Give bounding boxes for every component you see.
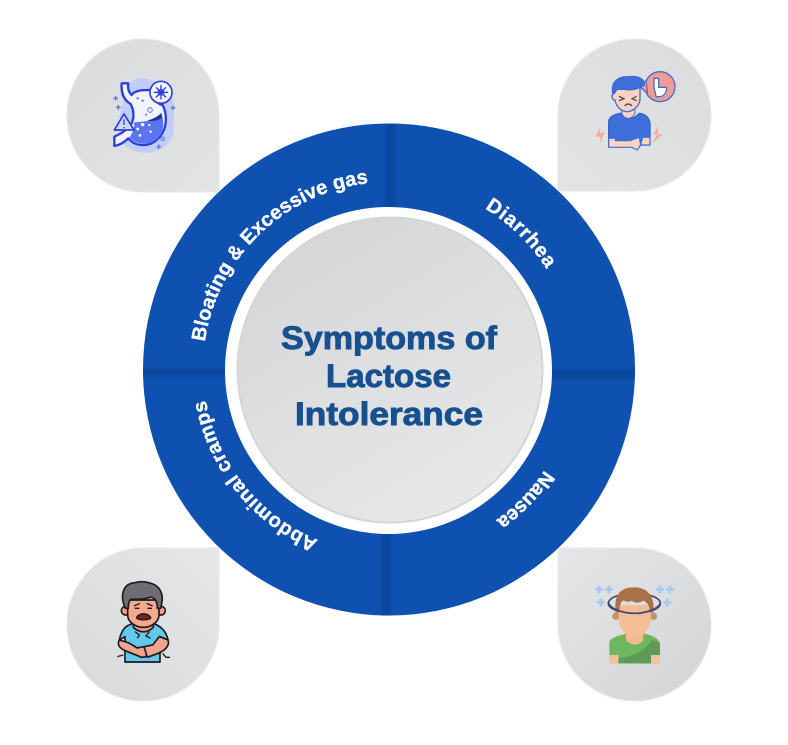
title: Intolerance: [295, 396, 483, 432]
title: [281, 320, 497, 432]
label: diarrhea: Diarrhea: [486, 197, 554, 270]
label: abdominal cramps: Abdominal cramps: [196, 401, 318, 550]
icon: man holding stomach: [117, 582, 170, 662]
icon: stomach with virus and warning: [113, 78, 175, 153]
icon: man with stomach ache and toilet bubble: [595, 72, 675, 150]
icon: dizzy man with halo and stars: [595, 585, 674, 663]
title: Symptoms of: [281, 320, 497, 356]
center hub: [225, 207, 552, 534]
panel: abdominal cramps icon petal: [67, 548, 219, 701]
panel: nausea icon petal: [558, 548, 711, 701]
label: nausea: Nausea: [496, 471, 556, 527]
panel: symptom ring: [143, 124, 635, 616]
infographic: symptoms of lactose intolerance: [66, 38, 712, 702]
label: bloating and excessive gas: Bloating & Excessive gas: [191, 172, 368, 341]
title: Lactose: [326, 358, 451, 394]
panel: bloating icon petal: [67, 39, 219, 192]
panel: diarrhea icon petal: [558, 39, 711, 191]
